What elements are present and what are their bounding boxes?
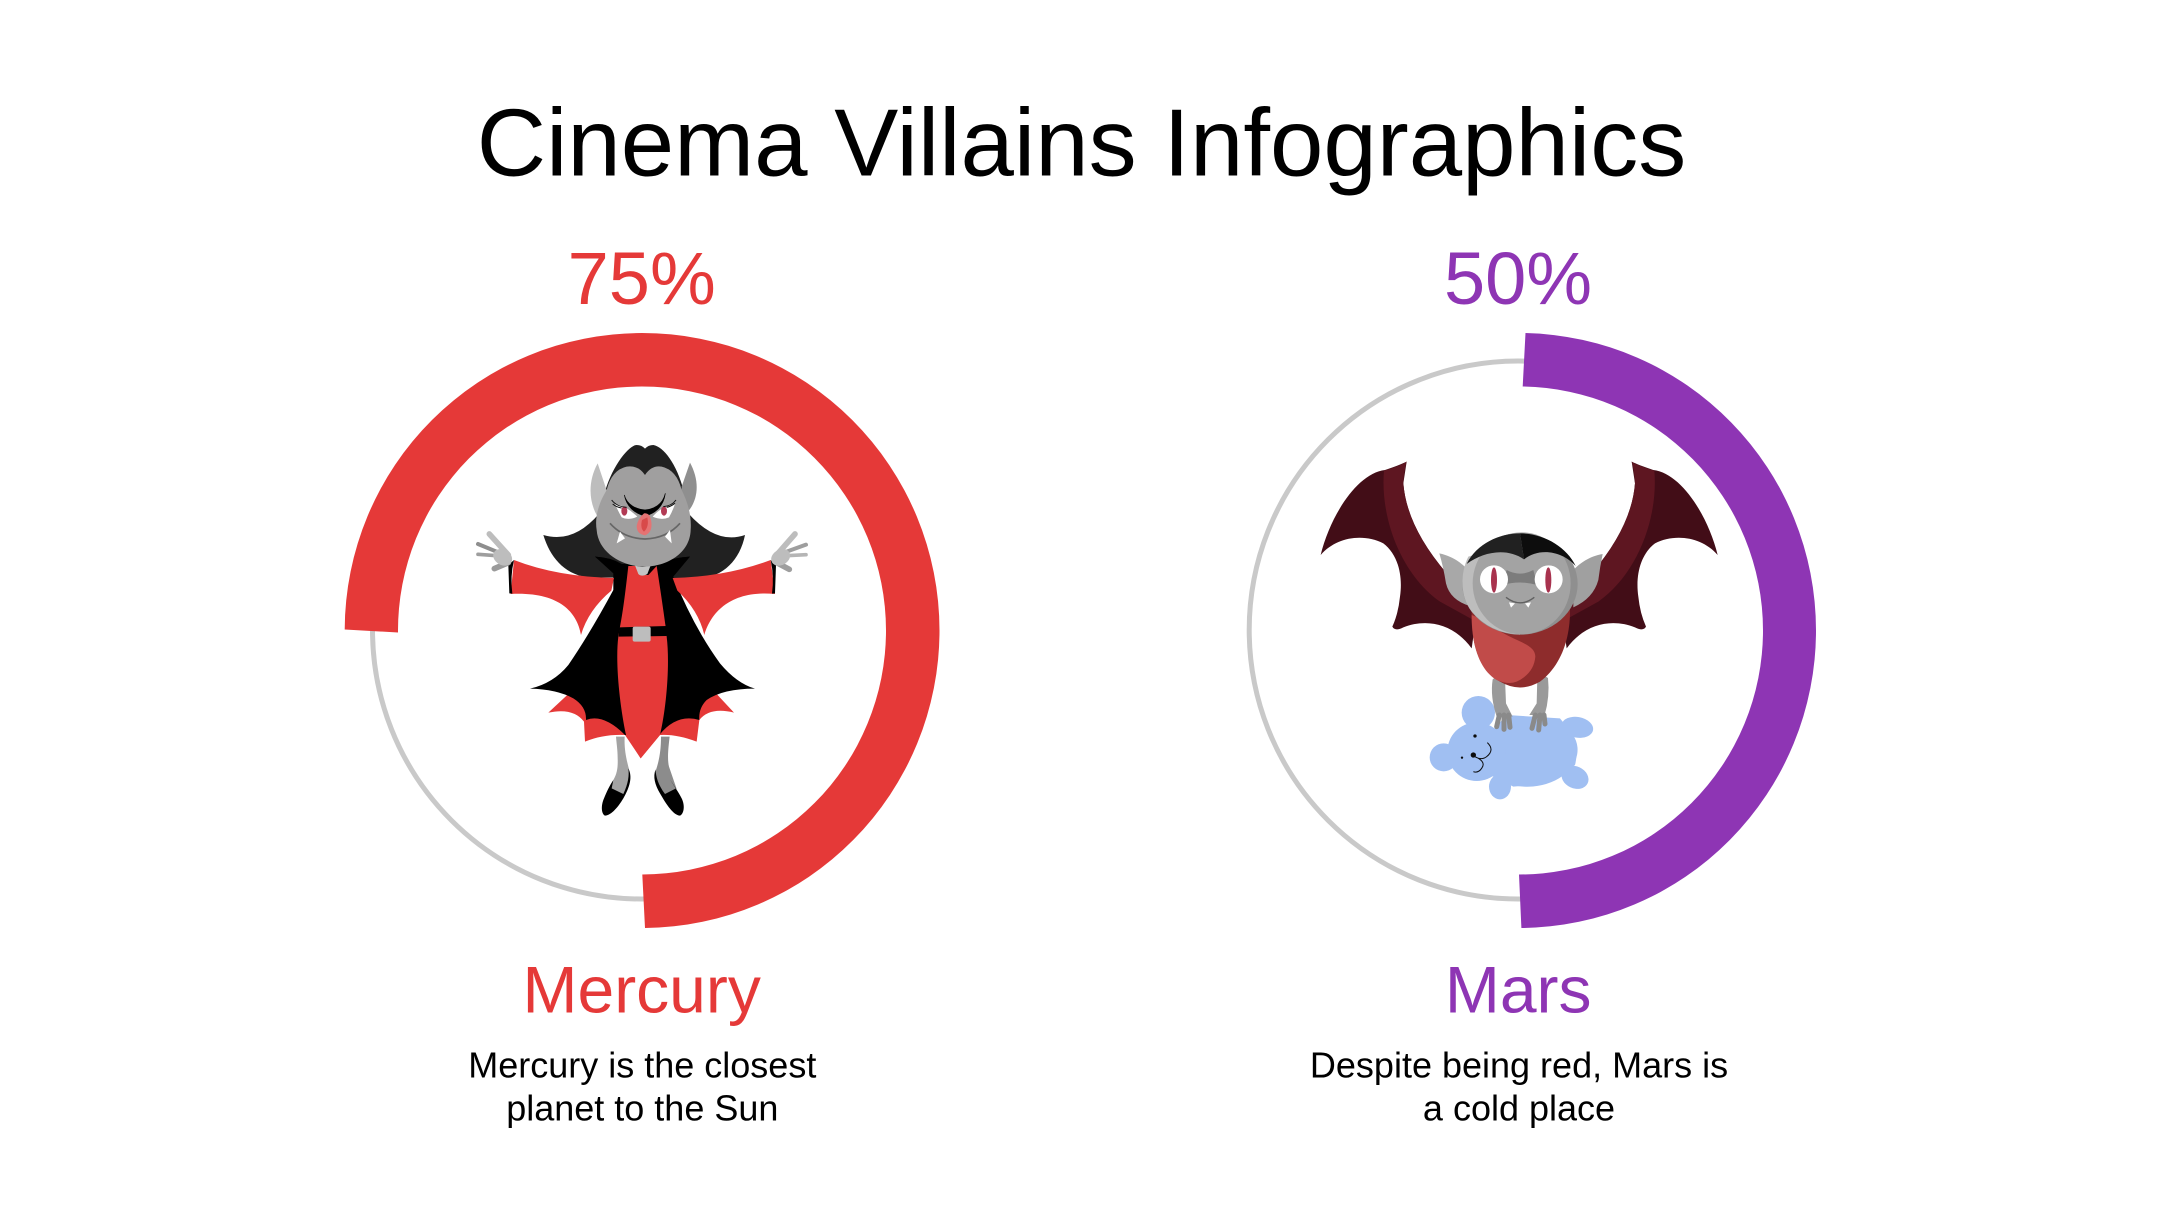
top hair xyxy=(605,445,684,492)
mouth and fangs xyxy=(610,523,680,543)
eyes xyxy=(612,493,676,519)
face xyxy=(596,466,691,567)
icon: bat head xyxy=(1462,532,1578,635)
donut chart: 75% xyxy=(345,333,940,928)
icon: vampire woman xyxy=(478,445,806,816)
description: Mercury: Mercury is the closest xyxy=(468,1044,816,1086)
sleeves xyxy=(508,560,776,635)
back hair xyxy=(543,513,745,578)
icon: teddy bear xyxy=(1430,696,1595,799)
percentage: 75%: 75% xyxy=(568,237,716,320)
description: Mars: a cold place xyxy=(1423,1088,1615,1128)
legs and shoes xyxy=(602,737,684,816)
title: Cinema Villains Infographics xyxy=(477,90,1686,196)
icon: bat ears xyxy=(1439,553,1603,607)
ears xyxy=(591,463,697,515)
description: Mars: Despite being red, Mars is xyxy=(1310,1044,1728,1086)
panel: mars xyxy=(1249,237,1816,1128)
cape lining xyxy=(548,694,734,758)
red dress xyxy=(617,566,668,758)
description: Mercury: planet to the Sun xyxy=(506,1088,778,1128)
neck xyxy=(635,565,651,576)
description: Mercury xyxy=(468,1044,816,1128)
heading: Mars: Mars xyxy=(1445,952,1592,1026)
left hand xyxy=(478,534,515,569)
donut chart: 50% xyxy=(1249,333,1816,928)
percentage: 50%: 50% xyxy=(1444,237,1592,320)
panel: mercury xyxy=(345,237,940,1128)
black coat xyxy=(530,557,755,735)
icon: vampire bat carrying teddy bear xyxy=(1321,462,1718,799)
right hand xyxy=(768,534,806,569)
icon: bat legs xyxy=(1492,676,1549,730)
nose xyxy=(637,513,652,535)
description: Mars xyxy=(1310,1044,1728,1128)
icon: bat wings xyxy=(1321,462,1718,648)
heading: Mercury: Mercury xyxy=(523,952,761,1026)
belt xyxy=(619,626,667,642)
icon: bat body xyxy=(1472,608,1570,687)
collar xyxy=(595,557,690,577)
